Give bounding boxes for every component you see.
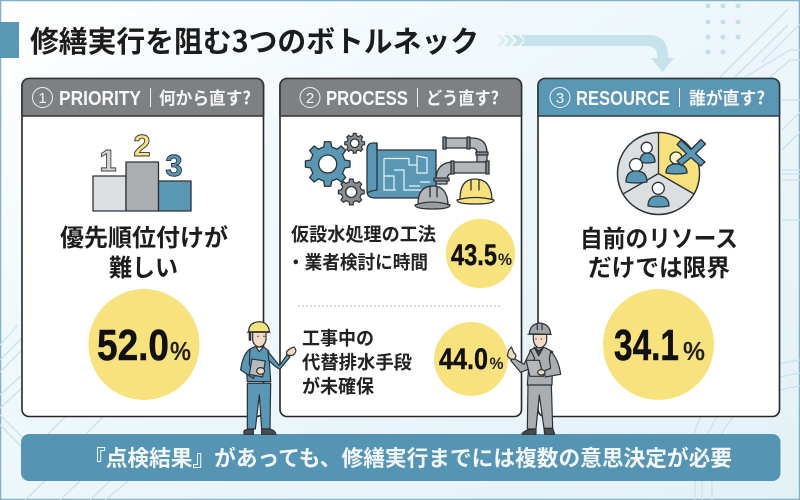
stat: 52.0%: % — [170, 336, 191, 366]
stat: 43.5% — [446, 219, 515, 288]
stat: 44.0%: % — [490, 354, 504, 373]
panel header: resource: RESOURCE — [576, 88, 670, 110]
text: resource finding — [580, 219, 738, 283]
worker: yellow helmet, blue uniform — [241, 322, 296, 434]
icon: podium: 2 — [133, 128, 151, 163]
title: 修繕実行を阻む3つのボトルネック — [30, 19, 479, 61]
text: drainage — [302, 325, 412, 399]
panel header: priority — [22, 78, 264, 116]
stat: 52.0% — [88, 289, 200, 400]
stat: 34.1%: 34.1 — [614, 321, 679, 370]
text: construction method: 仮設水処理の工法 — [291, 221, 436, 247]
footer banner: 『点検結果』があっても、修繕実行までには複数の意思決定が必要 — [84, 441, 732, 473]
panel header: resource: 誰が直す? — [689, 86, 765, 110]
panel: resource — [538, 78, 780, 416]
stat: 44.0%: 44.0 — [439, 343, 488, 376]
stat: 43.5%: % — [498, 250, 512, 269]
stat: 44.0% — [434, 322, 508, 396]
text: construction method — [287, 221, 436, 275]
icon: podium — [93, 128, 191, 211]
text: resource finding: だけでは限界 — [588, 248, 730, 283]
text: resource finding: 自前のリソース — [580, 219, 738, 254]
stat: 34.1%: % — [683, 336, 705, 366]
panel: process — [280, 78, 522, 416]
text: drainage: 代替排水手段 — [302, 349, 412, 375]
panel header: process: PROCESS — [326, 88, 408, 110]
panel header: process — [280, 78, 522, 116]
icon: pie of people with cross — [618, 132, 706, 214]
panel header: resource: 3 — [556, 90, 564, 107]
panel header: process: どう直す? — [426, 86, 499, 110]
text: construction method: ・業者検討に時間 — [287, 249, 428, 275]
icon: podium: 1 — [99, 143, 117, 178]
icon: gears, blueprint, pipes and helmets — [305, 133, 494, 209]
arrow: title to resource panel — [497, 35, 674, 72]
panel header: process: 2 — [306, 90, 314, 107]
footer banner — [21, 434, 780, 481]
worker: gray helmet, gray uniform — [507, 323, 561, 434]
panel header: resource — [538, 78, 780, 116]
panel: priority — [22, 78, 264, 416]
panel header: priority: PRIORITY — [59, 88, 142, 110]
text: drainage: 工事中の — [302, 325, 374, 351]
icon: podium: 3 — [165, 148, 183, 183]
text: priority finding: 優先順位付けが — [60, 218, 228, 253]
decorative dot grid — [706, 4, 740, 54]
stat: 52.0%: 52.0 — [97, 321, 169, 370]
text: priority finding: 難しい — [109, 248, 178, 283]
stat: 43.5%: 43.5 — [451, 239, 497, 272]
panel header: priority: 1 — [38, 90, 47, 107]
panel header: priority: 何から直す? — [159, 86, 251, 110]
stat: 34.1% — [603, 289, 714, 400]
title accent block — [0, 22, 19, 58]
text: priority finding — [60, 218, 228, 283]
text: drainage: が未確保 — [302, 373, 374, 399]
